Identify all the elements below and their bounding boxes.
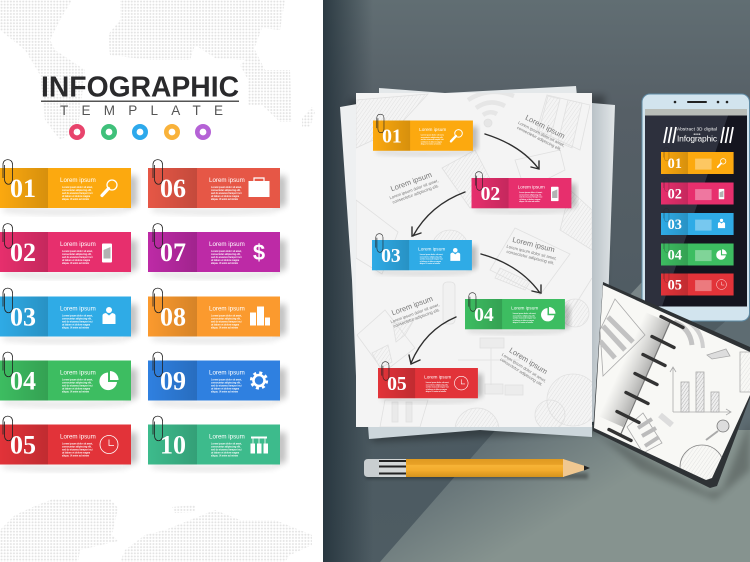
card 06: Lorem ipsum [209,177,245,184]
card 04: consectetur adipiscing elit, [62,382,92,384]
phone card 03: 03 [668,217,682,233]
colored rings [71,126,209,138]
notebook shadow [596,420,750,500]
card 07: ut labore et dolore magna [211,259,240,262]
step 02: aliqua. Ut enim ad minim [519,200,540,203]
phone card 03 [661,208,734,235]
card 10: aliqua. Ut enim ad minim [211,454,238,458]
step 04: ut labore et dolore magna [513,319,534,322]
card 05: Lorem ipsum [60,434,96,440]
card 09: ut labore et dolore magna [211,388,240,390]
phone heading: Infographic [677,134,717,144]
paper stack [340,86,615,442]
card 04: Lorem ipsum dolor sit amet, [62,378,93,382]
card 02: aliqua. Ut enim ad minim [62,262,89,265]
card 10: Lorem ipsum dolor sit amet, [211,442,242,446]
card 01: sed do eiusmod tempor inci [62,192,93,195]
card 06: ut labore et dolore magna [211,195,240,198]
notebook spine line [620,320,671,436]
card 02: Lorem ipsum dolor sit amet, [62,250,93,253]
step 02: Lorem ipsum [518,185,545,190]
card 01 [0,160,137,214]
step 02: sed do eiusmod tempor inci [519,196,543,199]
note 3: consectetur adipiscing elit. [506,249,555,266]
card 01: aliqua. Ut enim ad minim [62,198,89,201]
card 05: consectetur adipiscing elit, [62,446,92,448]
note 4: Lorem ipsum [390,294,434,317]
card 01: ut labore et dolore magna [62,195,91,198]
phone heading [664,126,733,144]
step 01: Lorem ipsum dolor sit amet, [421,134,444,137]
note 3: Lorem ipsum dolor sit amet, [506,244,557,261]
step 05: sed do eiusmod tempor inci [426,386,449,389]
card 05: aliqua. Ut enim ad minim [62,454,89,458]
card 03: consectetur adipiscing elit, [62,318,92,320]
note 2: consectetur adipiscing elit. [392,183,440,205]
card 04: ut labore et dolore magna [62,388,91,390]
phone card 02: 02 [668,186,682,202]
step 05: consectetur adipiscing elit, [426,383,449,386]
notebook [593,282,750,500]
card 06: 06 [160,174,186,203]
card 04: 04 [10,366,36,396]
step 03: Lorem ipsum dolor sit amet, [420,253,443,256]
notebook gutter shadow [597,312,670,427]
phone card 05 [661,269,734,296]
phone speaker and camera [674,101,728,103]
paper sketch drawings [356,92,599,452]
card 02: consectetur adipiscing elit, [62,253,92,256]
step 05: Lorem ipsum [424,375,451,380]
step 03: consectetur adipiscing elit, [420,255,443,258]
note 3 [505,234,560,266]
card 05: ut labore et dolore magna [62,452,91,454]
step 03: 03 [381,245,401,267]
card 05: Lorem ipsum dolor sit amet, [62,442,93,446]
card 08: ut labore et dolore magna [211,324,240,326]
phone heading: ●●●● [693,132,701,136]
card 08: Lorem ipsum [209,306,245,312]
card 03: ut labore et dolore magna [62,324,91,326]
dotted world map bottom [0,499,312,562]
card 06: Lorem ipsum dolor sit amet, [211,186,242,189]
card 04: aliqua. Ut enim ad minim [62,390,89,394]
card 05: sed do eiusmod tempor inci [62,448,93,452]
note 4: Lorem ipsum dolor sit amet, [390,302,440,324]
step 02: ut labore et dolore magna [519,198,540,201]
step 04: consectetur adipiscing elit, [513,314,536,317]
step 03 [372,234,476,275]
phone card 01 [661,147,734,174]
card 08: consectetur adipiscing elit, [211,318,241,320]
note 5: Lorem ipsum dolor sit amet, [501,352,547,383]
step 03: aliqua. Ut enim ad minim [420,262,441,265]
card 07: consectetur adipiscing elit, [211,253,241,256]
note 5 [498,343,553,388]
note 1: Lorem ipsum [524,113,566,141]
card 10: Lorem ipsum [209,434,245,440]
card 07: aliqua. Ut enim ad minim [211,262,238,265]
phone card 05: 05 [668,277,682,293]
card 10: 10 [160,430,186,460]
heading: template: TEMPLATE [60,103,223,118]
notebook cover [593,282,750,488]
card 03: sed do eiusmod tempor inci [62,320,93,324]
card 07: sed do eiusmod tempor inci [211,256,242,259]
card 08: Lorem ipsum dolor sit amet, [211,314,242,318]
card 07: $ [253,240,265,265]
card 10: ut labore et dolore magna [211,452,240,454]
card 03: 03 [10,302,36,332]
arrow 3 to 4 [481,254,541,293]
card 02: sed do eiusmod tempor inci [62,256,93,259]
card 09: aliqua. Ut enim ad minim [211,390,238,394]
card 01: 01 [10,174,36,203]
step 01 [373,114,477,155]
card 07 [148,224,286,278]
card 09: sed do eiusmod tempor inci [211,384,242,388]
notebook sketches [600,299,750,489]
card 02: Lorem ipsum [60,241,96,248]
card 01: Lorem ipsum [60,177,96,184]
step 01: consectetur adipiscing elit, [421,136,444,139]
note 2: Lorem ipsum [389,170,433,193]
step 01: sed do eiusmod tempor inci [421,138,444,141]
card 08: aliqua. Ut enim ad minim [211,326,238,330]
phone card 02 [661,178,734,204]
arrow 1 to 2 [485,134,539,169]
card 07: 07 [160,238,186,267]
step 04: 04 [474,304,494,326]
card 10: sed do eiusmod tempor inci [211,448,242,452]
card 04: Lorem ipsum [60,370,96,376]
card 08 [148,288,286,342]
step 02: consectetur adipiscing elit, [519,193,542,196]
card 09: 09 [160,366,186,396]
card 05: 05 [10,430,36,460]
card 06: consectetur adipiscing elit, [211,189,241,192]
card 01: Lorem ipsum dolor sit amet, [62,186,93,189]
step 03: Lorem ipsum [418,247,445,252]
step 04 [465,293,569,334]
white left panel [0,0,323,562]
card 02: 02 [10,238,36,267]
note 2 [385,169,441,205]
card 09 [148,352,286,406]
card 09: consectetur adipiscing elit, [211,382,241,384]
phone heading: Abstract 3D digital [677,126,717,132]
step 01: ut labore et dolore magna [421,140,442,143]
note 2: Lorem ipsum dolor sit amet, [389,178,439,200]
arrows [409,134,541,364]
card 05 [0,416,137,470]
step 01: 01 [382,125,402,147]
card 10: consectetur adipiscing elit, [211,446,241,448]
card 04 [0,352,137,406]
card 03 [0,288,137,342]
heading: infographic: INFOGRAPHIC [41,72,239,104]
card 09: Lorem ipsum [209,370,245,376]
card 08: sed do eiusmod tempor inci [211,320,242,324]
pencil [364,459,590,479]
card 08: 08 [160,302,186,332]
step 05: aliqua. Ut enim ad minim [426,390,447,393]
paper note labels [385,111,570,388]
note 3: Lorem ipsum [511,235,556,254]
step 04: sed do eiusmod tempor inci [513,317,536,320]
phone body [642,94,750,321]
note 4 [386,293,442,329]
step 05 [378,362,482,403]
notebook rings [609,316,683,440]
card 01: consectetur adipiscing elit, [62,189,92,192]
phone [642,94,750,321]
note 1 [515,111,570,152]
card 10 [148,416,286,470]
note 1: Lorem ipsum dolor sit amet, [517,120,566,148]
phone card 01: 01 [668,156,682,172]
card 06: aliqua. Ut enim ad minim [211,198,238,201]
phone card 04: 04 [668,247,682,263]
notebook page [594,285,750,480]
title [41,72,239,118]
step 04: Lorem ipsum [511,306,538,311]
step 05: 05 [387,373,407,395]
card 02: ut labore et dolore magna [62,259,91,262]
note 1: consectetur adipiscing elit. [516,125,562,152]
note 5: consectetur adipiscing elit. [499,357,544,387]
arrow 4 to 5 [409,317,456,364]
card 03: Lorem ipsum dolor sit amet, [62,314,93,318]
phone card 04 [661,239,734,266]
step 02 [472,172,576,213]
card 07: Lorem ipsum dolor sit amet, [211,250,242,253]
step 05: Lorem ipsum dolor sit amet, [426,381,449,384]
status bar [645,109,747,116]
card 03: Lorem ipsum [60,306,96,312]
step 05: ut labore et dolore magna [426,388,447,391]
step 03: ut labore et dolore magna [420,260,441,263]
step 04: aliqua. Ut enim ad minim [513,321,534,324]
card 03: aliqua. Ut enim ad minim [62,326,89,330]
step 03: sed do eiusmod tempor inci [420,258,443,261]
step 01: aliqua. Ut enim ad minim [421,143,442,146]
card 06: sed do eiusmod tempor inci [211,192,242,195]
step 02: Lorem ipsum dolor sit amet, [519,191,543,194]
arrow 2 to 3 [412,192,465,236]
card 02 [0,224,137,278]
step 02: 02 [481,183,500,205]
card 06 [148,160,286,214]
note 5: Lorem ipsum [508,346,549,376]
card 04: sed do eiusmod tempor inci [62,384,93,388]
dark desk background [323,0,750,562]
phone screen [645,116,747,306]
step 01: Lorem ipsum [419,127,446,132]
card 07: Lorem ipsum [209,241,245,248]
note 4: consectetur adipiscing elit. [393,307,441,329]
step 04: Lorem ipsum dolor sit amet, [513,312,536,315]
dotted world map top [0,0,315,140]
card 09: Lorem ipsum dolor sit amet, [211,378,242,382]
